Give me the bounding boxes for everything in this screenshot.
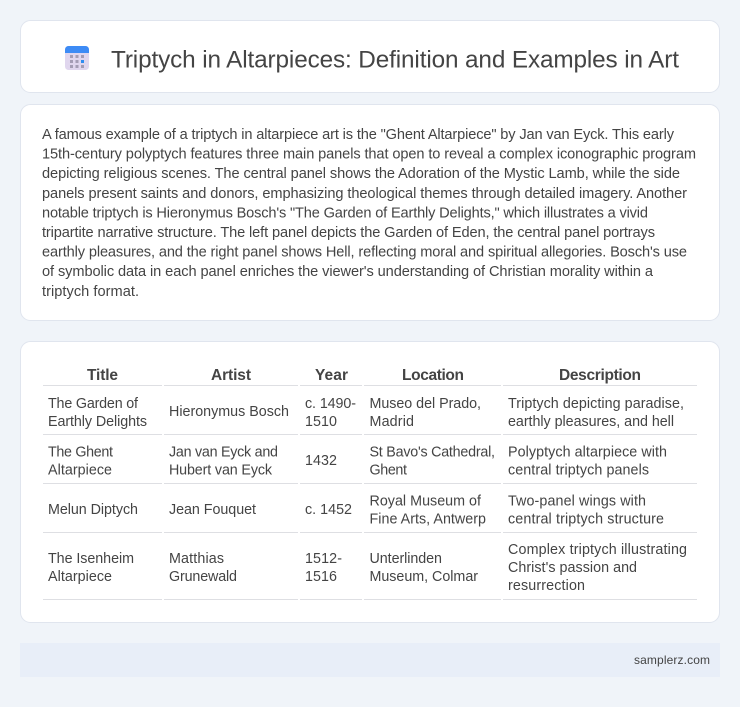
table header row <box>87 367 641 384</box>
table row: The Garden of Earthly Delights: Hieronymus Bosch <box>169 404 289 420</box>
table row: The Isenheim Altarpiece: Complex triptych illustrating <box>508 542 687 558</box>
table row: Melun Diptych: Fine Arts, Antwerp <box>370 512 486 528</box>
icon: calendar <box>65 46 89 70</box>
table row: The Isenheim Altarpiece: 1512- <box>305 551 342 567</box>
table header row: Location <box>402 367 464 384</box>
table row: Melun Diptych: Melun Diptych <box>48 502 138 518</box>
text block: paragraph: tripartite narrative structure. The left panel depicts the Garden of Eden, the central panel portrays <box>42 225 655 241</box>
text block: paragraph: notable triptych is Hieronymus Bosch's "The Garden of Earthly Delights," which illustrates a vivid <box>42 205 648 221</box>
table row: Melun Diptych <box>48 494 664 528</box>
table row: The Isenheim Altarpiece: Unterlinden <box>370 551 442 567</box>
table row: The Ghent Altarpiece <box>48 444 667 478</box>
table row: Melun Diptych: c. 1452 <box>305 502 352 518</box>
table row: The Garden of Earthly Delights: Triptych depicting paradise, <box>508 396 684 412</box>
table row: The Ghent Altarpiece: St Bavo's Cathedral, <box>370 444 495 460</box>
table row: The Isenheim Altarpiece: resurrection <box>508 578 585 594</box>
table row: The Ghent Altarpiece: Altarpiece <box>48 462 112 478</box>
table row: The Isenheim Altarpiece: Matthias <box>169 551 224 567</box>
table header row: Description <box>559 367 641 384</box>
title: Triptych in Altarpieces: Definition and Examples in Art <box>111 46 679 74</box>
text block: paragraph: panels present saints and donors, emphasizing theological themes through detailed imagery. Another <box>42 186 687 202</box>
text block: paragraph: depicting religious scenes. The central panel shows the Adoration of the Mystic Lamb, while the side <box>42 166 680 182</box>
footer credit: samplerz.com <box>634 653 710 667</box>
table row: The Garden of Earthly Delights: Madrid <box>370 414 414 430</box>
table row: The Isenheim Altarpiece <box>48 542 687 594</box>
table row: The Garden of Earthly Delights: The Garden of <box>48 396 138 412</box>
table row: The Garden of Earthly Delights: earthly pleasures, and hell <box>508 414 674 430</box>
table row: The Isenheim Altarpiece: The Isenheim <box>48 551 134 567</box>
table row: The Ghent Altarpiece: Polyptych altarpiece with <box>508 444 667 460</box>
table row: Melun Diptych: Two-panel wings with <box>508 494 646 510</box>
table row: The Garden of Earthly Delights: Museo del Prado, <box>370 396 481 412</box>
text block: paragraph: of symbolic data in each panel enriches the viewer's understanding of Christian morality within a <box>42 264 654 280</box>
text block: paragraph: earthly pleasures, and the right panel shows Hell, reflecting moral and spiritual allegories. Bosch's use <box>42 245 687 261</box>
table row: The Ghent Altarpiece: Ghent <box>370 462 407 478</box>
footer <box>20 643 720 677</box>
table row: Melun Diptych: central triptych structure <box>508 512 664 528</box>
table header row: Title <box>87 367 118 384</box>
table row: The Isenheim Altarpiece: Museum, Colmar <box>370 569 478 585</box>
table row: The Isenheim Altarpiece: Grunewald <box>169 569 237 585</box>
table row: The Garden of Earthly Delights: Earthly Delights <box>48 414 147 430</box>
table row: The Garden of Earthly Delights: 1510 <box>305 414 337 430</box>
table row: The Isenheim Altarpiece: Christ's passion and <box>508 560 637 576</box>
table row: Melun Diptych: Royal Museum of <box>370 494 481 510</box>
table row: The Garden of Earthly Delights <box>48 396 684 430</box>
text block: paragraph <box>42 127 696 300</box>
text block: paragraph: 15th-century polyptych features three main panels that open to reveal a complex iconographic program <box>42 147 696 163</box>
table header row: Year <box>315 367 348 384</box>
text block: paragraph: triptych format. <box>42 284 139 300</box>
table row: Melun Diptych: Jean Fouquet <box>169 502 256 518</box>
panel: description text <box>20 104 720 320</box>
table row: The Isenheim Altarpiece: 1516 <box>305 569 337 585</box>
table row: The Ghent Altarpiece: The Ghent <box>48 444 113 460</box>
table row: The Garden of Earthly Delights: c. 1490- <box>305 396 356 412</box>
panel: header <box>20 20 720 92</box>
text block: paragraph: A famous example of a triptych in altarpiece art is the "Ghent Altarpiece" by Jan van Eyck. This early <box>42 127 675 143</box>
table row: The Isenheim Altarpiece: Altarpiece <box>48 569 112 585</box>
table row: The Ghent Altarpiece: Jan van Eyck and <box>169 444 278 460</box>
panel: artworks table <box>20 342 720 622</box>
table row: The Ghent Altarpiece: 1432 <box>305 453 337 469</box>
table row: The Ghent Altarpiece: Hubert van Eyck <box>169 462 273 478</box>
table row: The Ghent Altarpiece: central triptych panels <box>508 462 649 478</box>
table header row: Artist <box>211 367 251 384</box>
